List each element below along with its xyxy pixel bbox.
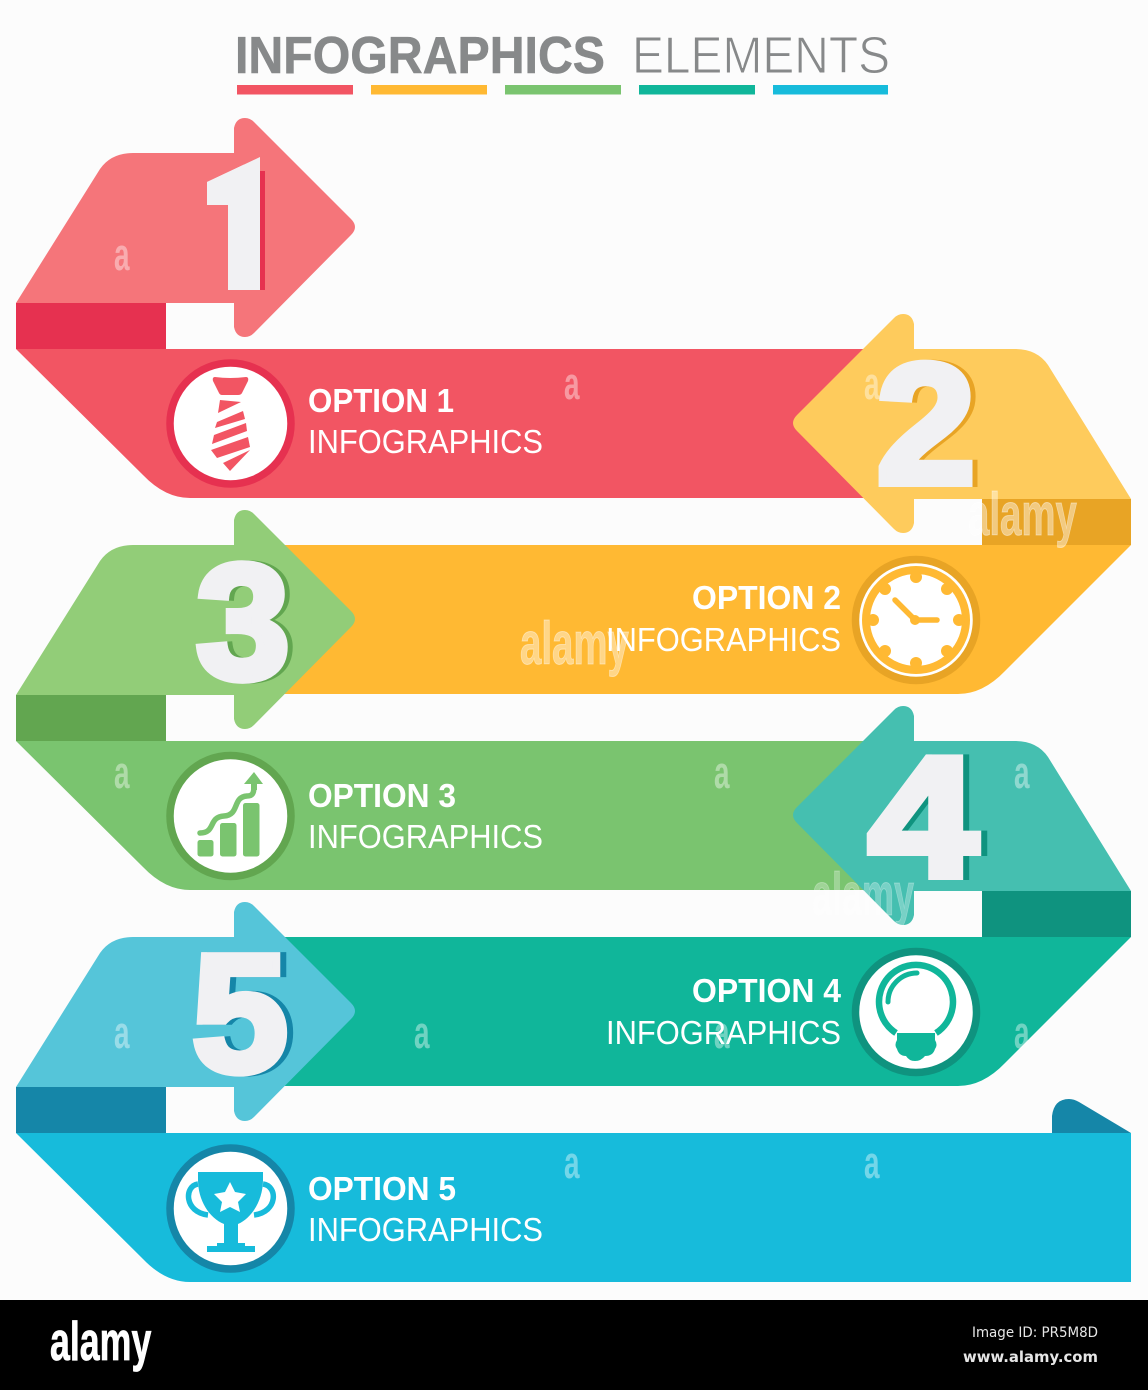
text: option 2: INFOGRAPHICS [606, 621, 841, 658]
text: option 2 [606, 579, 841, 658]
numeral 1: 1 [194, 126, 292, 325]
band: step 1 [16, 349, 880, 498]
watermarks: a [564, 1137, 580, 1188]
panel: step 2 [268, 314, 1131, 694]
text: option 4: OPTION 4 [692, 972, 842, 1009]
watermarks: a [414, 1007, 430, 1058]
band: step 4 [268, 937, 1131, 1086]
text: option 4 [606, 972, 842, 1051]
fold: step 4 [982, 891, 1131, 937]
text: option 5: OPTION 5 [308, 1170, 456, 1207]
watermarks: a [564, 358, 580, 409]
numeral 4: 4 [868, 722, 978, 913]
band: step 2 [268, 545, 1131, 694]
footer url: www.alamy.com [963, 1348, 1098, 1366]
watermarks: a [114, 1007, 130, 1058]
text: option 4: INFOGRAPHICS [606, 1014, 841, 1051]
fold: step 1 [16, 303, 166, 349]
text: option 1: OPTION 1 [308, 382, 454, 419]
watermarks: a [714, 1007, 730, 1058]
text: option 3 [308, 777, 543, 855]
footer logo: alamy [50, 1310, 152, 1372]
watermarks: alamy [812, 862, 914, 928]
numeral 5: 5 [192, 920, 288, 1106]
arrow: step 1 [16, 118, 355, 337]
text: option 3: INFOGRAPHICS [308, 818, 543, 855]
icon: growth chart [170, 756, 291, 876]
panel: step 1 [16, 118, 880, 498]
text: option 1: INFOGRAPHICS [308, 423, 543, 460]
title: ELEMENTS [632, 27, 890, 85]
arrow: step 5 [16, 902, 355, 1121]
watermarks: a [864, 1137, 880, 1188]
title [235, 27, 890, 85]
numeral 5: 5 [198, 920, 294, 1106]
numeral 4: 4 [874, 722, 984, 913]
numeral 1: 1 [188, 126, 288, 325]
panel: step 5 [16, 902, 1131, 1282]
fold: step 3 [16, 695, 166, 741]
footer image id: Image ID: PR5M8D [972, 1325, 1098, 1341]
text: option 1 [308, 382, 543, 460]
text: option 5: INFOGRAPHICS [308, 1211, 543, 1248]
watermarks: alamy [968, 480, 1077, 548]
numeral 2: 2 [877, 328, 975, 519]
panel: step 4 [268, 706, 1131, 1086]
numeral 1 [207, 157, 265, 290]
band: step 5 [16, 1133, 1131, 1282]
text: option 5 [308, 1170, 543, 1248]
text: option 2: OPTION 2 [692, 579, 841, 616]
watermarks: a [1014, 1007, 1030, 1058]
text: option 3: OPTION 3 [308, 777, 456, 814]
watermarks: a [114, 229, 130, 280]
watermarks: alamy [520, 609, 629, 677]
title: INFOGRAPHICS [235, 27, 605, 85]
panel: step 3 [16, 510, 880, 890]
numeral 2: 2 [882, 328, 980, 519]
fold: step 5 right tab [1052, 1099, 1131, 1133]
arrow: step 3 [16, 510, 355, 729]
watermarks: a [1014, 747, 1030, 798]
numeral 3: 3 [196, 531, 290, 713]
title colour bars [237, 85, 888, 94]
watermarks: a [714, 747, 730, 798]
icon: trophy [170, 1148, 291, 1269]
band: step 3 [16, 741, 880, 890]
numeral 3: 3 [201, 531, 295, 713]
icon: tie [170, 363, 291, 484]
watermarks: a [114, 747, 130, 798]
icon: light bulb [856, 952, 976, 1072]
arrow: step 2 [793, 314, 1131, 533]
footer bar [0, 1300, 1148, 1390]
watermarks [114, 229, 1077, 1188]
icon: clock [856, 560, 976, 680]
fold: step 2 [982, 499, 1131, 545]
arrow: step 4 [793, 706, 1131, 925]
fold: step 5 left [16, 1087, 166, 1133]
watermarks: a [864, 358, 880, 409]
